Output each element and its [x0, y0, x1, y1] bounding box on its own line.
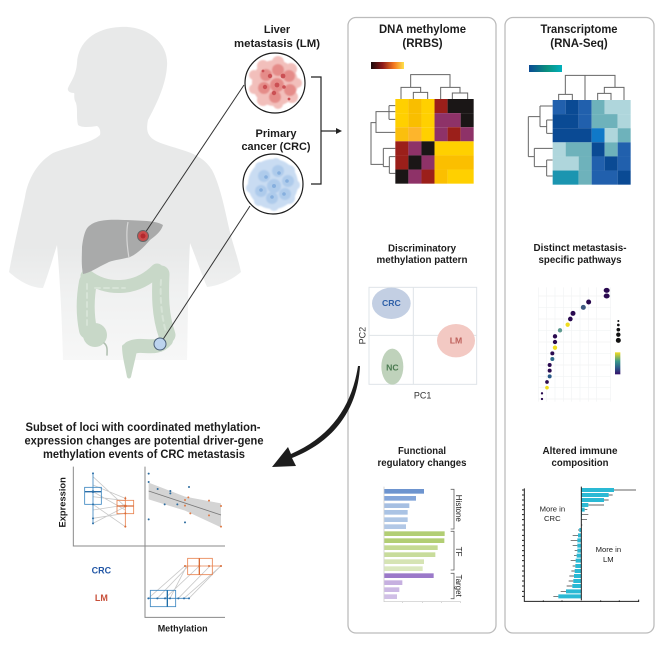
- bar chart: regulatory categories: TF: [454, 547, 463, 557]
- scatter plot with regression: [148, 473, 222, 528]
- label: liver metastasis: Liver: [264, 24, 291, 36]
- heading: distinct metastasis-specific pathways: Distinct metastasis-: [534, 243, 626, 254]
- legend: dot colour: [615, 352, 620, 374]
- label: primary cancer: Primary: [256, 128, 297, 140]
- heading: discriminatory methylation pattern: [376, 244, 468, 266]
- bar chart: regulatory categories: Target: [454, 575, 463, 598]
- panel: transcriptome: [505, 18, 654, 633]
- label: more in CRC: CRC: [544, 514, 561, 523]
- heading: driver-gene methylation summary: [24, 422, 264, 461]
- label: liver metastasis: metastasis (LM): [234, 38, 320, 50]
- heading: transcriptome: [540, 24, 618, 50]
- heading: functional regulatory changes: regulatory changes: [378, 458, 467, 469]
- heatmap: expression: [528, 75, 631, 185]
- heading: distinct metastasis-specific pathways: [534, 243, 626, 266]
- heading: altered immune composition: composition: [552, 458, 608, 469]
- PCA chart: PC2: [357, 327, 367, 344]
- liver: [82, 220, 163, 274]
- label: primary cancer: cancer (CRC): [242, 141, 311, 153]
- axis label: methylation: Methylation: [158, 624, 208, 634]
- heading: driver-gene methylation summary: methylation events of CRC metastasis: [43, 449, 245, 461]
- bar chart: immune composition: [522, 487, 639, 602]
- chart group: methylation vs expression: [57, 467, 225, 634]
- legend: methylation colour bar: [371, 62, 404, 69]
- leader line: colon to CRC: [160, 206, 250, 344]
- heading: transcriptome: Transcriptome: [540, 24, 618, 36]
- heatmap: methylation: [371, 75, 474, 184]
- icon: liver metastasis cell cluster: [245, 53, 305, 113]
- arrow to omics panels: [321, 128, 342, 134]
- legend: dot size: [616, 320, 621, 343]
- icon: liver tumour marker: [138, 230, 148, 242]
- label: more in LM: [596, 545, 621, 564]
- heading: DNA methylome: DNA methylome: [379, 24, 466, 36]
- leader line: liver to LM: [143, 85, 244, 236]
- legend: LM: LM: [95, 593, 108, 603]
- label: liver metastasis: [234, 24, 320, 50]
- heading: driver-gene methylation summary: expression changes are potential driver-gene: [24, 436, 264, 448]
- heading: functional regulatory changes: Functional: [398, 446, 446, 457]
- PCA chart: LM: [450, 335, 462, 345]
- human body silhouette: [9, 27, 241, 360]
- heading: altered immune composition: [542, 446, 618, 469]
- dot plot: pathways: [538, 287, 621, 402]
- label: more in LM: LM: [603, 555, 614, 564]
- axis label: expression: Expression: [57, 477, 67, 527]
- heading: DNA methylome: [379, 24, 466, 50]
- legend: CRC: CRC: [92, 566, 112, 576]
- PCA chart: CRC: [382, 298, 401, 308]
- colon: [83, 270, 167, 378]
- heading: discriminatory methylation pattern: Discriminatory: [388, 244, 456, 254]
- bar chart: regulatory categories: Histone: [454, 495, 463, 522]
- heading: driver-gene methylation summary: Subset of loci with coordinated methylation-: [26, 422, 261, 434]
- icon: primary cancer cell cluster: [243, 154, 303, 214]
- boxplot: expression by group: [85, 472, 134, 528]
- panel: DNA methylome: [348, 18, 496, 633]
- PCA chart: [357, 287, 477, 400]
- PCA chart: NC: [386, 362, 399, 372]
- label: more in LM: More in: [596, 545, 621, 554]
- label: primary cancer: [242, 128, 311, 153]
- heading: discriminatory methylation pattern: methylation pattern: [376, 255, 468, 266]
- PCA chart: PC1: [414, 390, 431, 400]
- label: more in CRC: More in: [540, 504, 565, 513]
- legend: expression colour bar: [529, 65, 562, 72]
- curved arrow to driver-gene summary: [272, 366, 360, 467]
- heading: altered immune composition: Altered immune: [542, 446, 618, 457]
- bracket joining samples: [311, 77, 321, 184]
- heading: functional regulatory changes: [378, 446, 467, 469]
- icon: colon tumour marker: [154, 338, 166, 350]
- heading: distinct metastasis-specific pathways: specific pathways: [538, 255, 622, 266]
- heading: DNA methylome: (RRBS): [402, 38, 443, 50]
- boxplot: methylation by group: [147, 558, 222, 607]
- label: more in CRC: [540, 504, 565, 523]
- bar chart: regulatory categories: [384, 487, 463, 603]
- heading: transcriptome: (RNA-Seq): [550, 38, 608, 50]
